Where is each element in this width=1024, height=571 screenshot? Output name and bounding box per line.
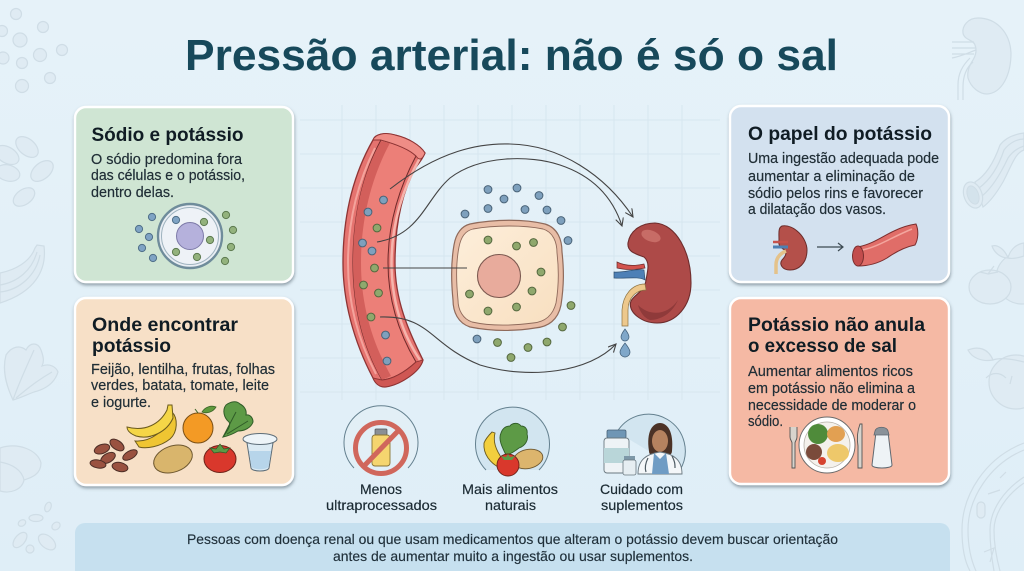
icon: potato: [150, 440, 196, 478]
panel: onde encontrar potássio: [75, 298, 293, 485]
text block: sódio e potássio: dentro delas.: [91, 185, 174, 201]
text block: alimentos: verdes, batata, tomate, leite: [91, 378, 269, 394]
label: menos ultraprocessados: [326, 481, 437, 513]
text block: excesso de sal: Aumentar alimentos ricos: [748, 364, 913, 380]
icon: supplements and health professional: [604, 414, 685, 475]
text block: excesso de sal: [748, 364, 916, 430]
label: mais alimentos naturais: naturais: [485, 497, 536, 513]
label: cuidado com suplementos: suplementos: [601, 497, 683, 513]
label: cuidado com suplementos: Cuidado com: [600, 481, 683, 497]
text block: papel do potássio: sódio pelos rins e favorecer: [748, 186, 923, 202]
icon group: menos ultraprocessados: [326, 406, 437, 513]
background doodles: right side: [952, 18, 1024, 571]
ions around cell: [461, 184, 575, 361]
icon: prohibited bottle: [344, 406, 418, 474]
blood vessel: [343, 134, 425, 387]
icon: dilated vessel: [852, 224, 918, 266]
panel: o papel do potássio: [730, 106, 949, 282]
heading: onde encontrar potássio: Onde encontrar: [92, 314, 238, 336]
title: Pressão arterial: não é só o sal: [185, 31, 838, 80]
text block: excesso de sal: sódio.: [748, 414, 783, 430]
icon: plate with fork, knife and salt shaker: [790, 417, 892, 473]
text block: alimentos: Feijão, lentilha, frutas, folhas: [91, 362, 275, 378]
icon: yogurt: [243, 434, 277, 471]
text block: sódio e potássio: das células e o potássio,: [91, 168, 245, 184]
heading: sódio e potássio: Sódio e potássio: [92, 124, 244, 146]
arrow: kidney to vessel: [817, 243, 843, 251]
heading: potássio não anula: o excesso de sal: [748, 335, 897, 357]
icon: orange: [183, 406, 216, 443]
arrows: vessel to kidney and cell: [377, 144, 633, 372]
text block: papel do potássio: aumentar a eliminação de: [748, 169, 915, 185]
footer note: [75, 523, 950, 571]
text block: sódio e potássio: [91, 152, 245, 201]
text block: papel do potássio: [748, 151, 939, 218]
icon group: mais alimentos naturais: [462, 407, 558, 513]
background doodles: left side: [0, 8, 68, 553]
panel: potássio não anula o excesso de sal: [730, 298, 949, 484]
heading: onde encontrar potássio: [92, 314, 238, 357]
heading: o papel do potássio: O papel do potássio: [748, 123, 932, 145]
icon: tomato: [204, 444, 236, 472]
text block: sódio e potássio: O sódio predomina fora: [91, 152, 242, 168]
heading: potássio não anula: Potássio não anula: [748, 314, 925, 336]
label: cuidado com suplementos: [600, 481, 683, 513]
label: menos ultraprocessados: Menos: [360, 481, 402, 497]
text block: alimentos: e iogurte.: [91, 395, 151, 411]
heading: potássio não anula: [748, 314, 925, 357]
heading: onde encontrar potássio: potássio: [92, 335, 171, 357]
text block: alimentos: [91, 362, 275, 411]
label: menos ultraprocessados: ultraprocessados: [326, 497, 437, 513]
icon: cell with ions: [135, 204, 237, 268]
icon: small kidney: [773, 226, 807, 274]
icon: spinach: [223, 402, 253, 437]
icon: bananas: [127, 405, 176, 448]
text block: excesso de sal: necessidade de moderar o: [748, 398, 916, 414]
kidney: [614, 223, 691, 357]
text block: papel do potássio: a dilatação dos vasos.: [748, 202, 886, 218]
ions inside vessel: [359, 196, 391, 365]
cell: [452, 220, 563, 331]
icon: beans: [89, 437, 139, 473]
panel: sódio e potássio: [75, 107, 293, 282]
footer note: antes de aumentar muito a ingestão ou usar suplementos.: [333, 549, 693, 564]
footer note: Pessoas com doença renal ou que usam medicamentos que alteram o potássio devem buscar orientação: [187, 532, 838, 547]
icon group: cuidado com suplementos: [600, 414, 685, 513]
icon: natural foods: [476, 407, 550, 476]
label: mais alimentos naturais: [462, 481, 558, 513]
diagram: blood vessel, cell and kidney: [343, 134, 691, 387]
text block: papel do potássio: Uma ingestão adequada pode: [748, 151, 939, 167]
text block: excesso de sal: em potássio não elimina a: [748, 381, 915, 397]
label: mais alimentos naturais: Mais alimentos: [462, 481, 558, 497]
